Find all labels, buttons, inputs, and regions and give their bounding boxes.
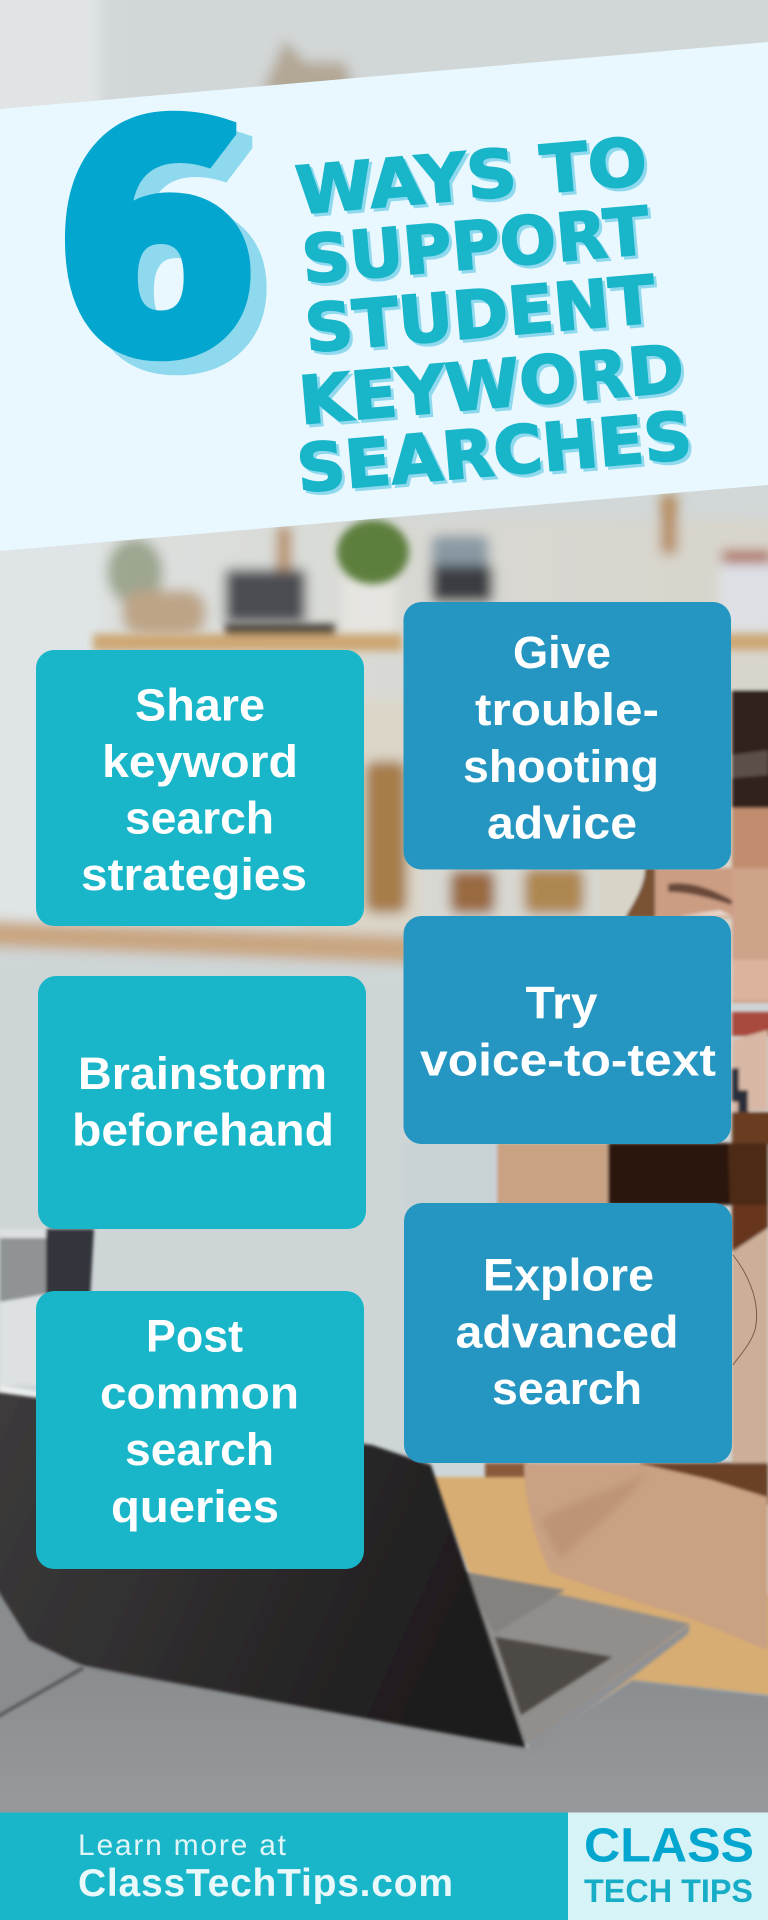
- card: explore advanced search: advanced: [456, 1306, 678, 1358]
- heading: ways to support student keyword searches: SUPPORT: [302, 195, 655, 302]
- heading: ways to support student keyword searches: [293, 123, 698, 511]
- card: post common search queries: Post: [146, 1310, 243, 1362]
- heading: ways to support student keyword searches: SEARCHES: [297, 400, 698, 511]
- card: share keyword search strategies: [36, 650, 364, 926]
- footer bar: [0, 1812, 768, 1920]
- card: explore advanced search: Explore: [483, 1250, 654, 1300]
- heading: ways to support student keyword searches: KEYWORD: [296, 330, 687, 440]
- card: share keyword search strategies: search: [125, 792, 274, 844]
- logo: class tech tips: [568, 1812, 768, 1920]
- woman: hair, face, hand, jacket: [404, 660, 768, 1505]
- laptop lid: [0, 1392, 526, 1748]
- card: try voice-to-text: [404, 916, 731, 1144]
- logo: class tech tips: TECH TIPS: [584, 1873, 753, 1909]
- big number 6: 6: [69, 74, 276, 439]
- card: try voice-to-text: Try: [526, 978, 598, 1028]
- card: post common search queries: common: [100, 1368, 299, 1418]
- card: post common search queries: [36, 1291, 364, 1569]
- big number 6: [64, 110, 267, 376]
- card: share keyword search strategies: strategies: [81, 849, 307, 900]
- heading: ways to support student keyword searches: SEARCHES: [294, 397, 695, 508]
- title band: [0, 42, 768, 551]
- card: give troubleshooting advice: [404, 602, 731, 870]
- footer text: learn more at: Learn more at: [78, 1829, 287, 1862]
- heading: ways to support student keyword searches: SUPPORT: [299, 192, 652, 299]
- card: brainstorm beforehand: [38, 976, 366, 1229]
- card: share keyword search strategies: Share: [135, 680, 265, 730]
- heading: ways to support student keyword searches: WAYS TO: [293, 123, 650, 230]
- card: give troubleshooting advice: trouble-: [475, 684, 659, 735]
- card: brainstorm beforehand: beforehand: [72, 1104, 334, 1156]
- wooden table: [431, 1477, 768, 1745]
- card: explore advanced search: search: [492, 1363, 642, 1414]
- heading: ways to support student keyword searches: WAYS TO: [296, 126, 653, 233]
- card: share keyword search strategies: keyword: [102, 736, 298, 787]
- card: post common search queries: queries: [111, 1481, 279, 1532]
- card: explore advanced search: [404, 1203, 732, 1463]
- card: try voice-to-text: voice-to-text: [420, 1034, 716, 1086]
- logo: class tech tips: CLASS: [584, 1820, 754, 1872]
- table cloth: [0, 1586, 768, 1815]
- footer text: website: ClassTechTips.com: [78, 1862, 453, 1905]
- laptop base and keyboard: [462, 1572, 690, 1754]
- sleeve: [524, 1463, 768, 1650]
- card: give troubleshooting advice: advice: [487, 798, 637, 848]
- card: post common search queries: search: [125, 1424, 274, 1475]
- card: give troubleshooting advice: Give: [513, 627, 611, 678]
- card: brainstorm beforehand: Brainstorm: [78, 1048, 327, 1099]
- big number 6: 6: [53, 60, 260, 425]
- heading: ways to support student keyword searches: STUDENT: [305, 264, 661, 371]
- chair: [0, 1229, 94, 1398]
- heading: ways to support student keyword searches: STUDENT: [302, 261, 658, 368]
- card: give troubleshooting advice: shooting: [463, 741, 659, 792]
- heading: ways to support student keyword searches: KEYWORD: [299, 333, 690, 443]
